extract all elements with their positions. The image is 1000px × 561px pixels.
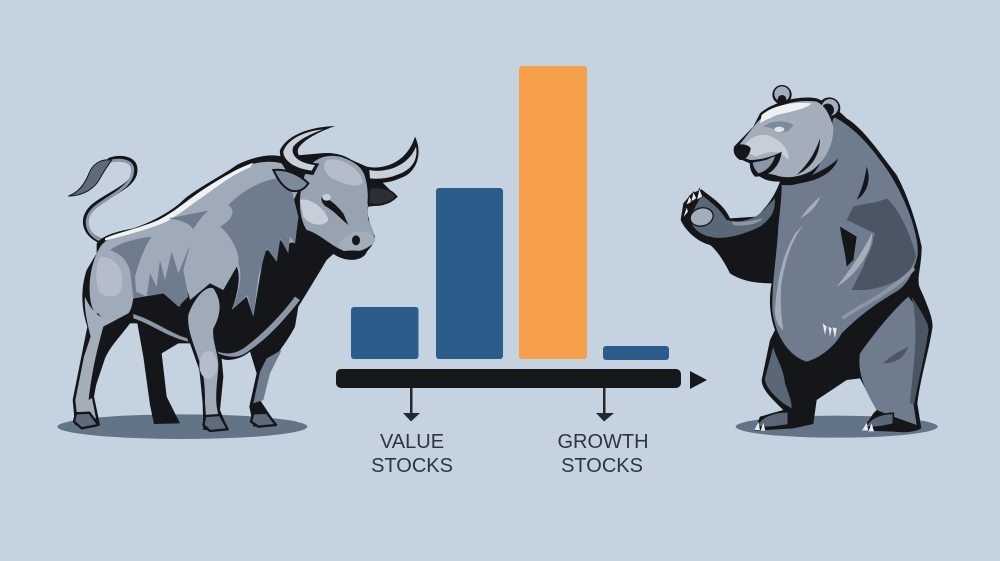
bear rear leg — [859, 297, 928, 425]
bull tail tuft — [68, 160, 112, 196]
bull back highlight — [105, 163, 253, 241]
bear face light — [740, 135, 789, 160]
bear eye — [774, 127, 784, 132]
bull hind leg near — [75, 297, 125, 418]
bull flank fur shading — [110, 237, 190, 307]
bull left ear — [273, 170, 308, 191]
illustration: bull — [57, 126, 419, 439]
bear front leg — [765, 347, 792, 408]
bull right horn — [367, 137, 419, 183]
bear brow and eye — [763, 121, 793, 132]
bear torso — [772, 117, 918, 362]
axis bar — [336, 369, 681, 388]
bull front leg far detail — [253, 350, 282, 403]
bear silhouette — [681, 97, 933, 432]
bear rear dark fur — [842, 198, 916, 310]
bar 1: blue — [351, 307, 418, 359]
bull head — [300, 156, 374, 252]
bull muzzle — [338, 232, 375, 253]
label: value stocks: STOCKS — [371, 455, 453, 477]
label: value stocks: VALUE — [380, 431, 444, 453]
bull haunch — [96, 257, 122, 297]
bear shoulder dark stroke — [840, 167, 869, 267]
bear foot claws — [754, 422, 874, 431]
bull forehead highlight — [324, 159, 363, 186]
bear teeth and tongue — [753, 156, 775, 173]
bear chest highlight — [775, 197, 820, 330]
bear leg shadow — [883, 297, 928, 403]
bear jaw stripes — [783, 138, 838, 185]
bull eye — [322, 194, 331, 201]
bull tail — [85, 158, 135, 241]
label: growth stocks: GROWTH — [557, 431, 649, 453]
bear head — [737, 101, 833, 177]
bear nose — [734, 144, 751, 160]
bar 3: orange — [519, 66, 587, 359]
label: growth stocks: STOCKS — [561, 455, 643, 477]
bar chart — [336, 66, 707, 477]
bull cheek highlight — [300, 199, 328, 225]
bull ground shadow — [57, 414, 307, 439]
bull hooves — [74, 413, 276, 431]
bar 4: blue — [603, 346, 669, 360]
bull shoulder shading — [220, 178, 298, 317]
axis arrowhead — [690, 371, 707, 389]
bear ground shadow — [736, 416, 938, 438]
bar 2: blue — [436, 188, 503, 359]
illustration: bear — [681, 85, 938, 438]
bull nostril — [352, 235, 360, 245]
bear arm highlight — [732, 218, 763, 226]
bull left horn — [280, 126, 335, 175]
bear mouth — [750, 152, 782, 177]
bull knee highlight — [199, 351, 217, 379]
arrow: growth stocks — [596, 388, 614, 422]
bear head highlight — [760, 103, 812, 123]
bull silhouette — [73, 153, 397, 430]
bull belly line — [133, 297, 300, 357]
bear left ear — [772, 85, 792, 104]
bear paw pad — [688, 205, 715, 229]
bear raised side arm — [821, 233, 913, 328]
arrow: value stocks — [403, 388, 420, 422]
bull torso light fur — [90, 162, 298, 322]
bear side-hand claws — [823, 323, 837, 338]
bear right ear — [818, 97, 840, 119]
bear near hand — [821, 290, 853, 328]
bull mouth — [340, 251, 367, 259]
bear paw claws — [683, 188, 703, 218]
bear arm — [690, 195, 775, 238]
bull front leg middle — [188, 288, 220, 425]
bull right ear — [368, 187, 397, 205]
bear rim light — [842, 267, 915, 320]
bear arm highlight — [837, 233, 872, 287]
bull eye and brow — [321, 197, 348, 225]
bull back mark — [168, 211, 208, 229]
bull hind leg shade — [89, 313, 132, 400]
bear feet — [757, 412, 893, 427]
